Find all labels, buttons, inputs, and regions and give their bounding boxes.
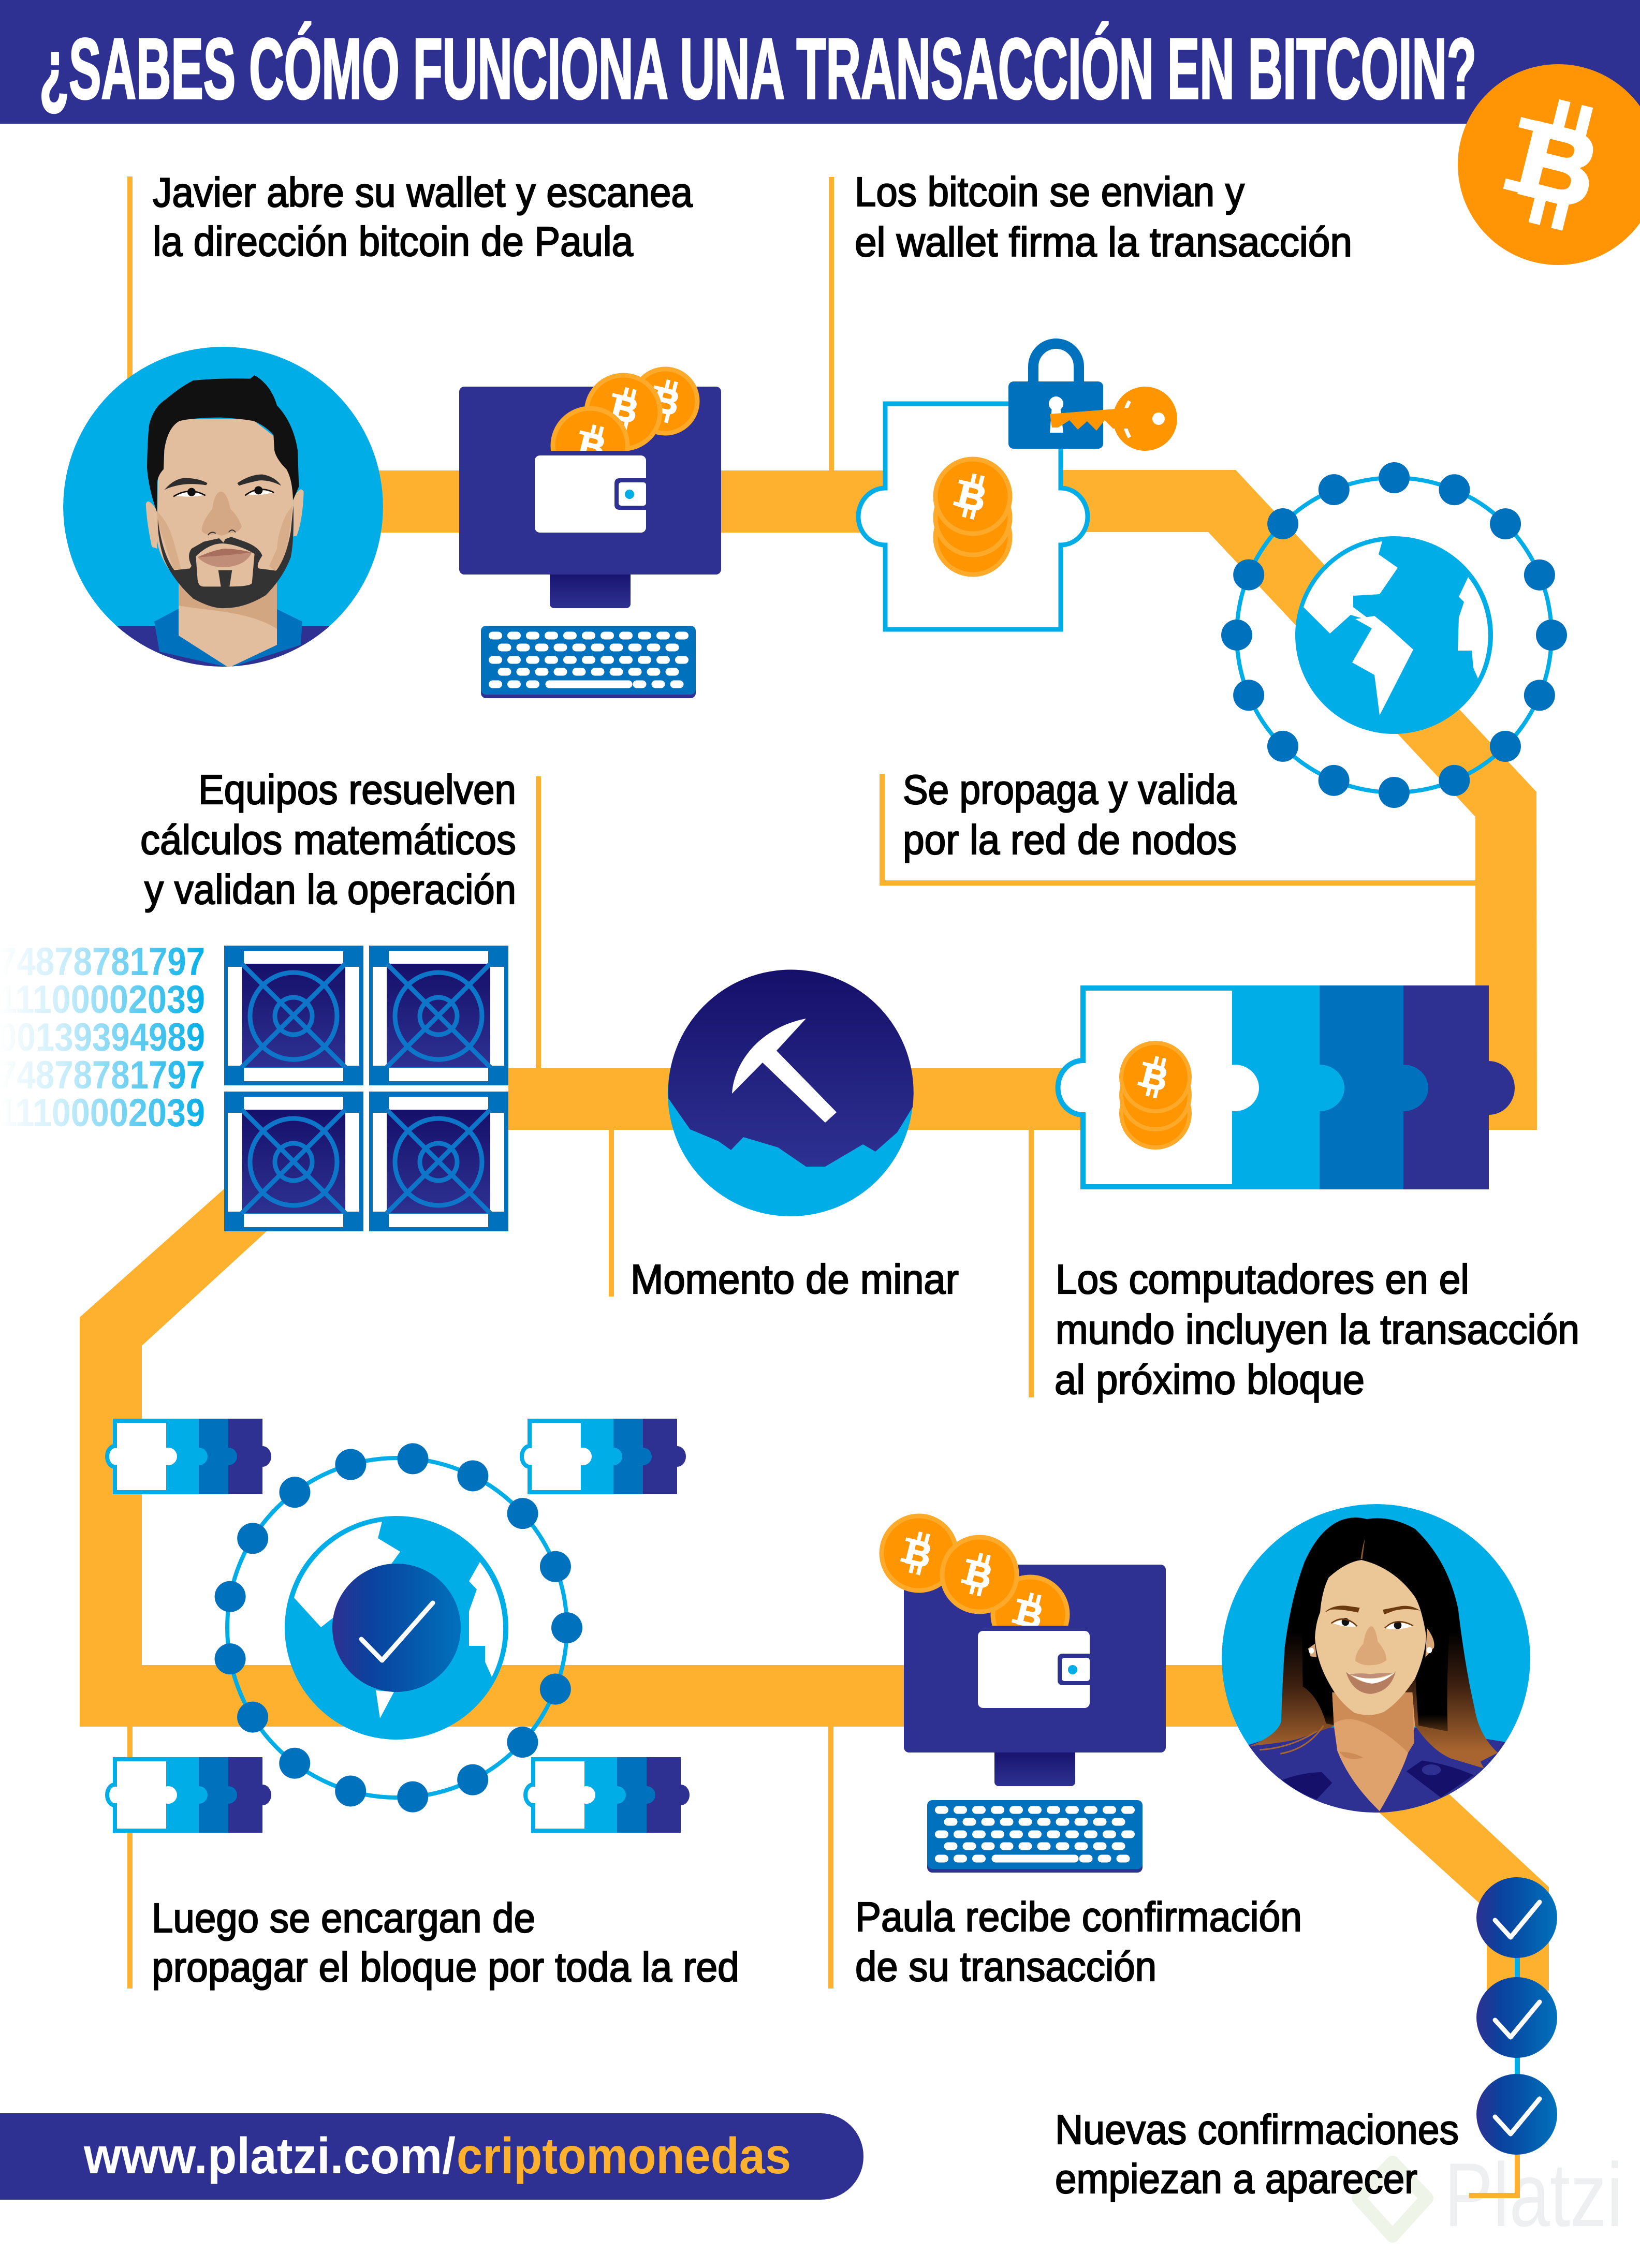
text: mining moment: Momento de minar (631, 1256, 959, 1302)
text: new confirmations: Nuevas confirmaciones (1055, 2107, 1459, 2153)
mini block: bottom right (525, 1757, 690, 1833)
confirmations chain (1469, 1877, 1557, 2196)
icon: mining pickaxe circle (668, 969, 914, 1216)
footer url pill: www.platzi.com/ (83, 2127, 456, 2184)
globe (1295, 536, 1493, 734)
rig 4 (369, 1092, 508, 1231)
icon: bitcoin badge: B (1507, 98, 1609, 231)
wallet (535, 455, 646, 533)
icon: bitcoin badge (1458, 64, 1640, 265)
rig 1 (224, 946, 363, 1085)
mini block: top left (107, 1419, 271, 1494)
text: step 2 (855, 169, 1352, 265)
coins leaving wallet: B (962, 1553, 996, 1597)
text: miners: cálculos matemáticos (140, 817, 516, 863)
connector lines (130, 176, 1478, 1989)
text: propagate block: propagar el bloque por toda la red (152, 1944, 739, 1990)
icon: padlock and key (1008, 344, 1177, 451)
footer url pill (0, 2113, 863, 2200)
check 1 (1476, 1877, 1557, 1958)
coin stack: B (1138, 1055, 1172, 1099)
globe with check (285, 1516, 508, 1740)
rig 2 (369, 946, 508, 1085)
text: Paula confirmation: de su transacción (855, 1943, 1156, 1990)
rig 3 (224, 1092, 363, 1231)
text: miners: y validan la operación (144, 866, 516, 912)
text: propagation: Se propaga y valida (903, 767, 1237, 813)
text: miners: Equipos resuelven (198, 767, 516, 813)
text: step 1: Javier abre su wallet y escanea (153, 169, 693, 215)
text: miners (140, 767, 516, 912)
text: new confirmations (1055, 2107, 1459, 2202)
binary digits: 00139394989 (0, 1015, 205, 1059)
binary digits (0, 940, 205, 1135)
monitor with wallet: Javier (459, 369, 721, 608)
keyboard: Paula (927, 1800, 1143, 1873)
coin stack (1121, 1043, 1190, 1147)
text: computers include the transaction: al próximo bloque (1055, 1357, 1365, 1403)
mini block: top right (522, 1419, 686, 1494)
text: propagate block: Luego se encargan de (152, 1895, 535, 1941)
text: Paula confirmation (855, 1894, 1302, 1990)
text: computers include the transaction: mundo incluyen la transacción (1056, 1306, 1579, 1352)
binary digits: 11100002039 (0, 978, 205, 1022)
text: computers include the transaction: Los computadores en el (1056, 1256, 1469, 1302)
header band (0, 0, 1640, 124)
portrait: Paula (1222, 1504, 1530, 1817)
network globe: block propagation (227, 1458, 567, 1798)
portrait: Javier (63, 347, 383, 672)
mini block: bottom left (107, 1757, 271, 1833)
keyboard: Javier (481, 626, 696, 698)
coins entering wallet (553, 369, 697, 483)
text: propagation: por la red de nodos (903, 817, 1237, 863)
coins leaving wallet: B (901, 1531, 935, 1575)
check 3 (1476, 2074, 1557, 2155)
orange path: miners down and along to Paula (80, 1113, 1242, 1727)
binary digits: 74878781797 (0, 1053, 205, 1097)
text: step 1 (153, 169, 693, 264)
text: step 2: el wallet firma la transacción (855, 219, 1352, 265)
coins entering wallet: B (575, 424, 609, 468)
coin stack (935, 459, 1010, 575)
binary digits: 11100002039 (0, 1091, 205, 1135)
orange path: puzzle through network down to block and miners (466, 470, 1537, 1130)
coins entering wallet: B (649, 379, 683, 423)
check 2 (1476, 1977, 1557, 2058)
coin stack: B (954, 474, 990, 520)
coins entering wallet: B (608, 387, 642, 431)
mining rigs (224, 946, 508, 1231)
network globe: propagation (1237, 478, 1551, 792)
block chain puzzle: next block (1058, 985, 1515, 1189)
orange path: Javier to puzzle (362, 470, 1035, 533)
coins leaving wallet: B (1013, 1593, 1047, 1637)
footer url pill: criptomonedas (457, 2127, 791, 2184)
text: step 2: Los bitcoin se envian y (855, 169, 1244, 215)
coins leaving wallet (882, 1516, 1067, 1652)
watermark: Platzi (1358, 2145, 1623, 2246)
text: Paula confirmation: Paula recibe confirmación (855, 1894, 1302, 1940)
orange path: Paula to confirmations (1367, 1746, 1549, 1991)
text: computers include the transaction (1055, 1256, 1579, 1403)
puzzle block: signing (858, 404, 1088, 629)
text: step 1: la dirección bitcoin de Paula (153, 218, 633, 264)
text: new confirmations: empiezan a aparecer (1055, 2156, 1417, 2202)
wallet (978, 1631, 1090, 1708)
text: propagation (903, 767, 1237, 863)
text: propagate block (152, 1895, 739, 1990)
monitor with wallet: Paula (882, 1516, 1166, 1786)
binary digits: 74878781797 (0, 940, 205, 984)
